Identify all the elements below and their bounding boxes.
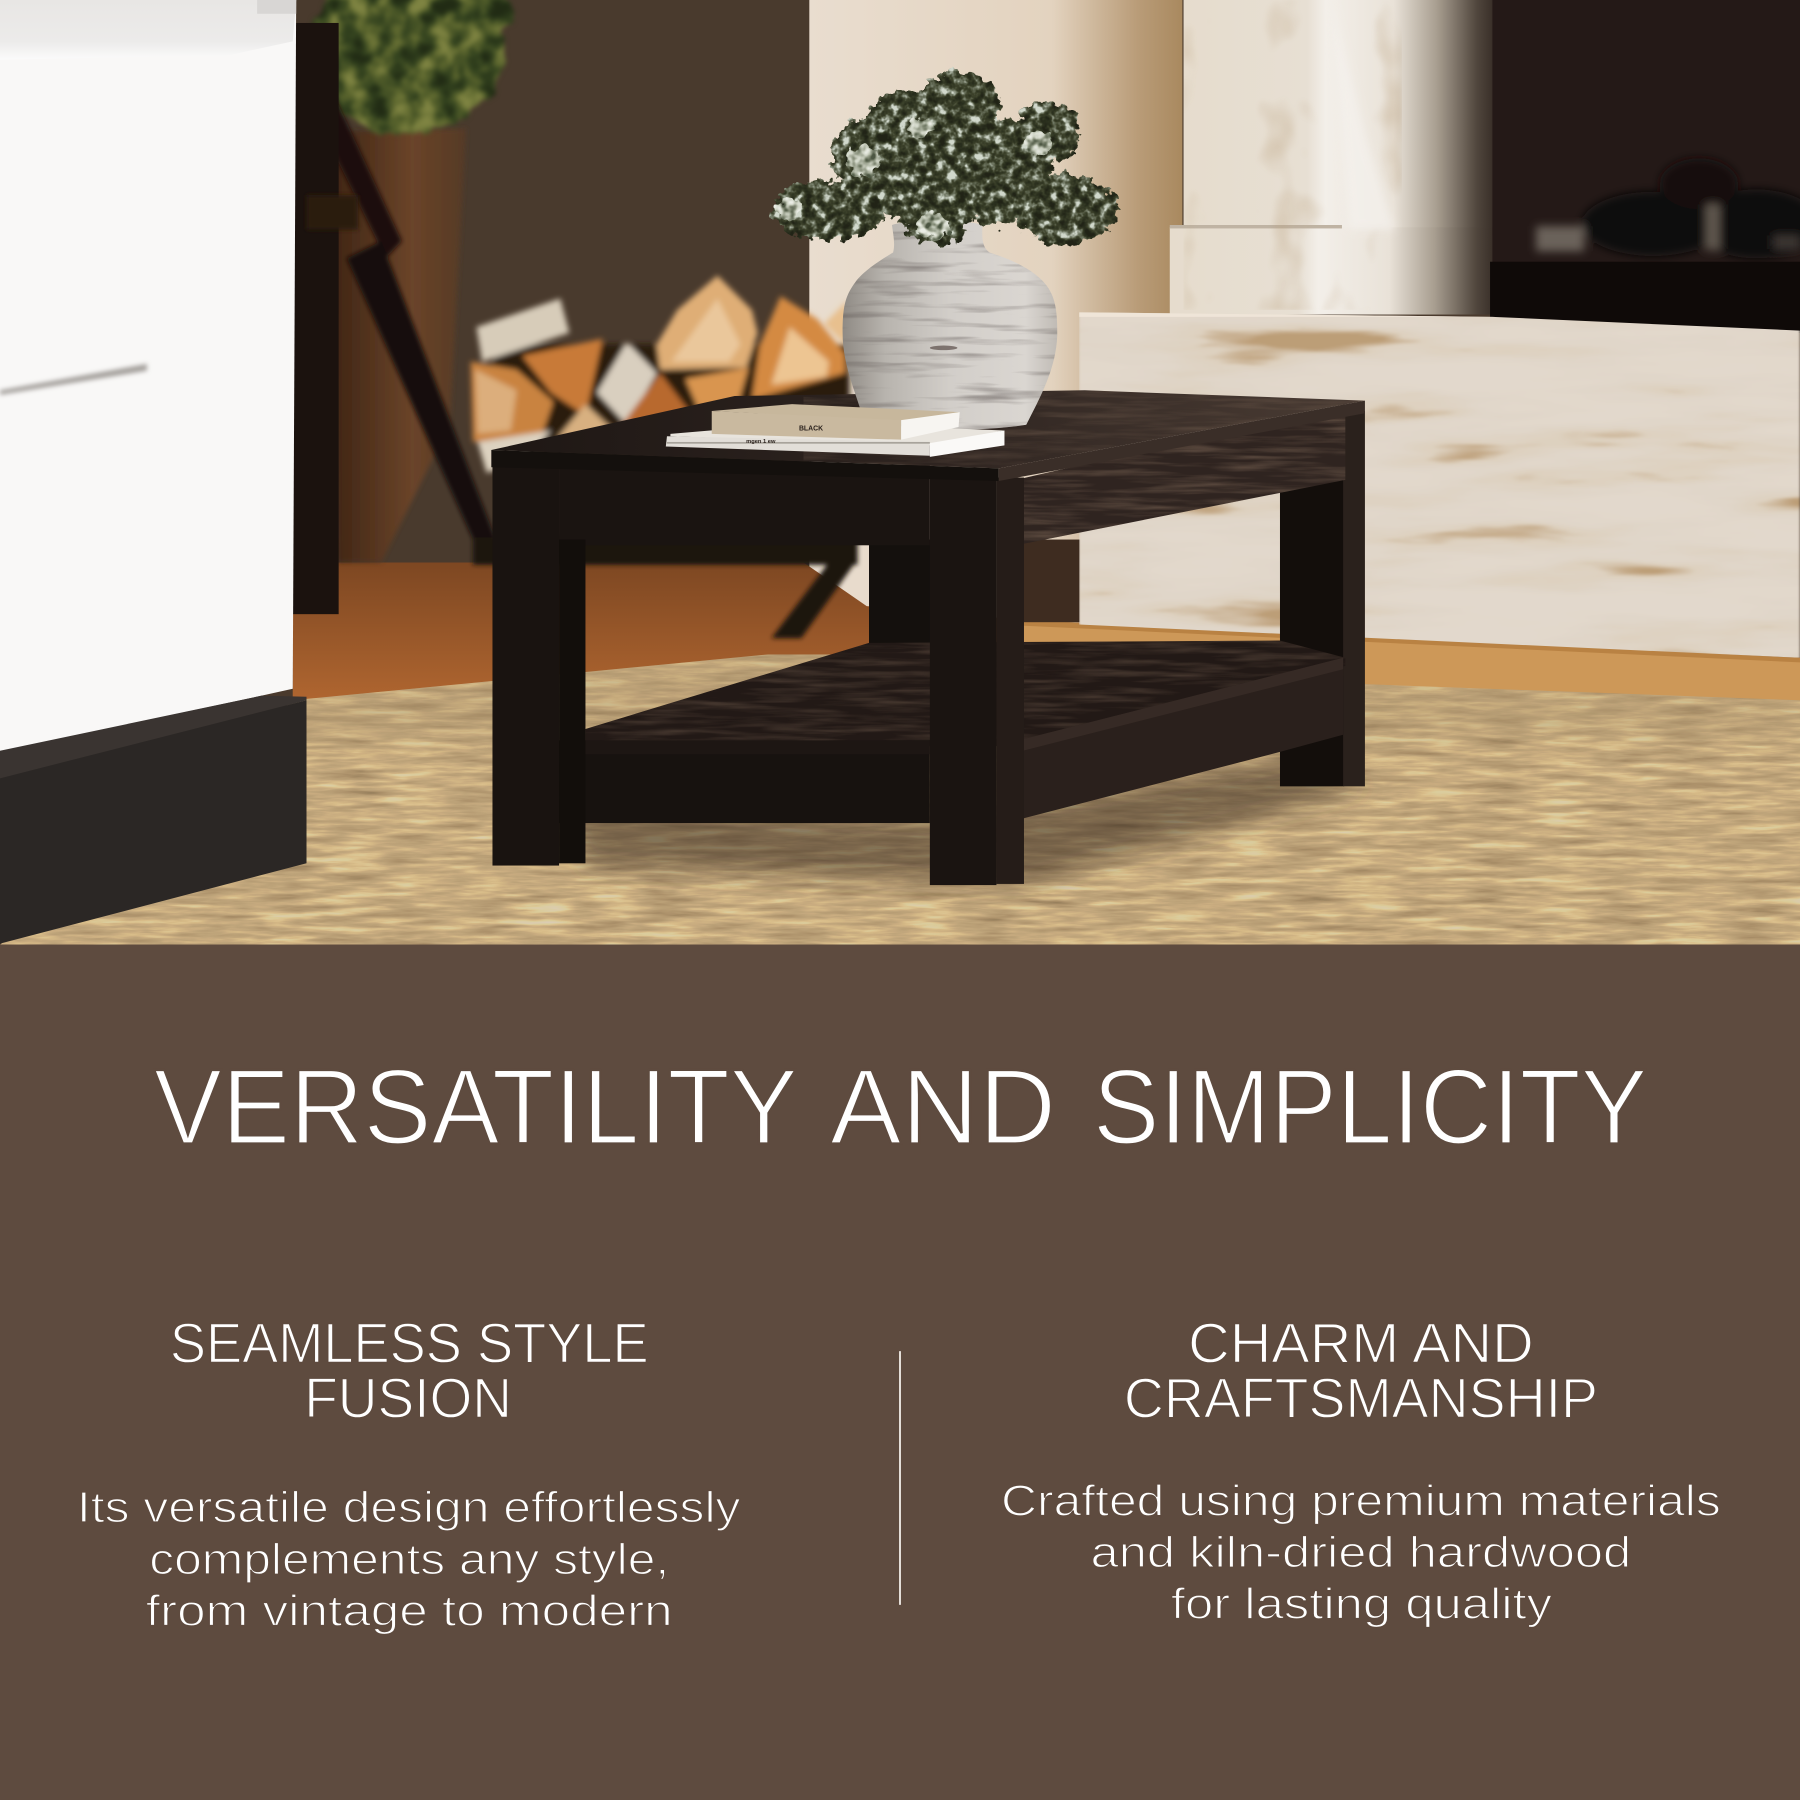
- beige wall: [809, 0, 1182, 626]
- lower white book: [666, 422, 1004, 457]
- lower book spine text: mgen 1 ew: [746, 439, 776, 445]
- body text: charm and craftsmanship: [1001, 1477, 1721, 1629]
- coffee table: [491, 390, 1366, 885]
- heading: charm and craftsmanship: CHARM AND: [1188, 1312, 1534, 1375]
- panel: text background: [0, 945, 1800, 1800]
- lower shelf: [580, 637, 1349, 752]
- flower highlights: [777, 118, 1053, 239]
- lower front rail: [559, 740, 930, 823]
- heading: charm and craftsmanship: CRAFTSMANSHIP: [1124, 1367, 1598, 1430]
- body text: charm and craftsmanship: for lasting quality: [1171, 1581, 1552, 1629]
- title: [154, 1046, 1647, 1166]
- sofa: [0, 0, 307, 944]
- vase: [843, 221, 1057, 430]
- front left leg: [492, 465, 585, 866]
- back plant pot: [331, 129, 466, 563]
- panel: product photo: [0, 0, 1800, 945]
- column: charm and craftsmanship: [1001, 1312, 1721, 1629]
- title: AND: [830, 1046, 1056, 1166]
- dark sofa frame post: [292, 23, 339, 614]
- fireplace: [1490, 0, 1800, 333]
- heading: seamless style fusion: FUSION: [304, 1367, 512, 1430]
- background plant: [303, 0, 512, 134]
- books: [666, 404, 1004, 457]
- wooden log stand: [312, 98, 858, 638]
- heading: seamless style fusion: SEAMLESS STYLE: [170, 1312, 649, 1375]
- body text: seamless style fusion: complements any style,: [149, 1536, 669, 1584]
- shadow beside hearth: [1024, 540, 1080, 622]
- back left leg: [869, 540, 932, 746]
- body text: seamless style fusion: from vintage to modern: [146, 1588, 673, 1636]
- marble pillar: [1170, 0, 1492, 315]
- sofa base: [0, 696, 307, 781]
- column: seamless style fusion: [77, 1312, 741, 1636]
- dark brown wall: [293, 0, 809, 562]
- wood floor: [293, 562, 1800, 703]
- body text: charm and craftsmanship: and kiln-dried hardwood: [1091, 1529, 1631, 1577]
- title: SIMPLICITY: [1093, 1046, 1647, 1166]
- body text: seamless style fusion: [77, 1484, 741, 1636]
- column divider: [899, 1351, 901, 1605]
- fireplace coals: [1536, 158, 1800, 258]
- heading: charm and craftsmanship: [1124, 1312, 1598, 1430]
- firewood logs: [471, 276, 849, 473]
- rug: [0, 643, 1800, 945]
- body text: charm and craftsmanship: Crafted using premium materials: [1001, 1477, 1721, 1525]
- back right leg: [1280, 411, 1365, 786]
- upper tan book: [712, 404, 960, 440]
- lower side rail: [1023, 658, 1343, 818]
- upper front apron: [559, 465, 930, 545]
- body text: seamless style fusion: Its versatile design effortlessly: [77, 1484, 741, 1532]
- table top: [491, 390, 1366, 481]
- heading: seamless style fusion: [170, 1312, 649, 1430]
- marble hearth: [1079, 310, 1800, 660]
- foliage bouquet: [771, 71, 1118, 245]
- table shadow on rug: [562, 758, 1366, 884]
- title: VERSATILITY: [154, 1046, 798, 1166]
- upper side apron: [1016, 402, 1347, 546]
- front corner leg: [930, 478, 1024, 885]
- book spine text: BLACK: [799, 425, 823, 432]
